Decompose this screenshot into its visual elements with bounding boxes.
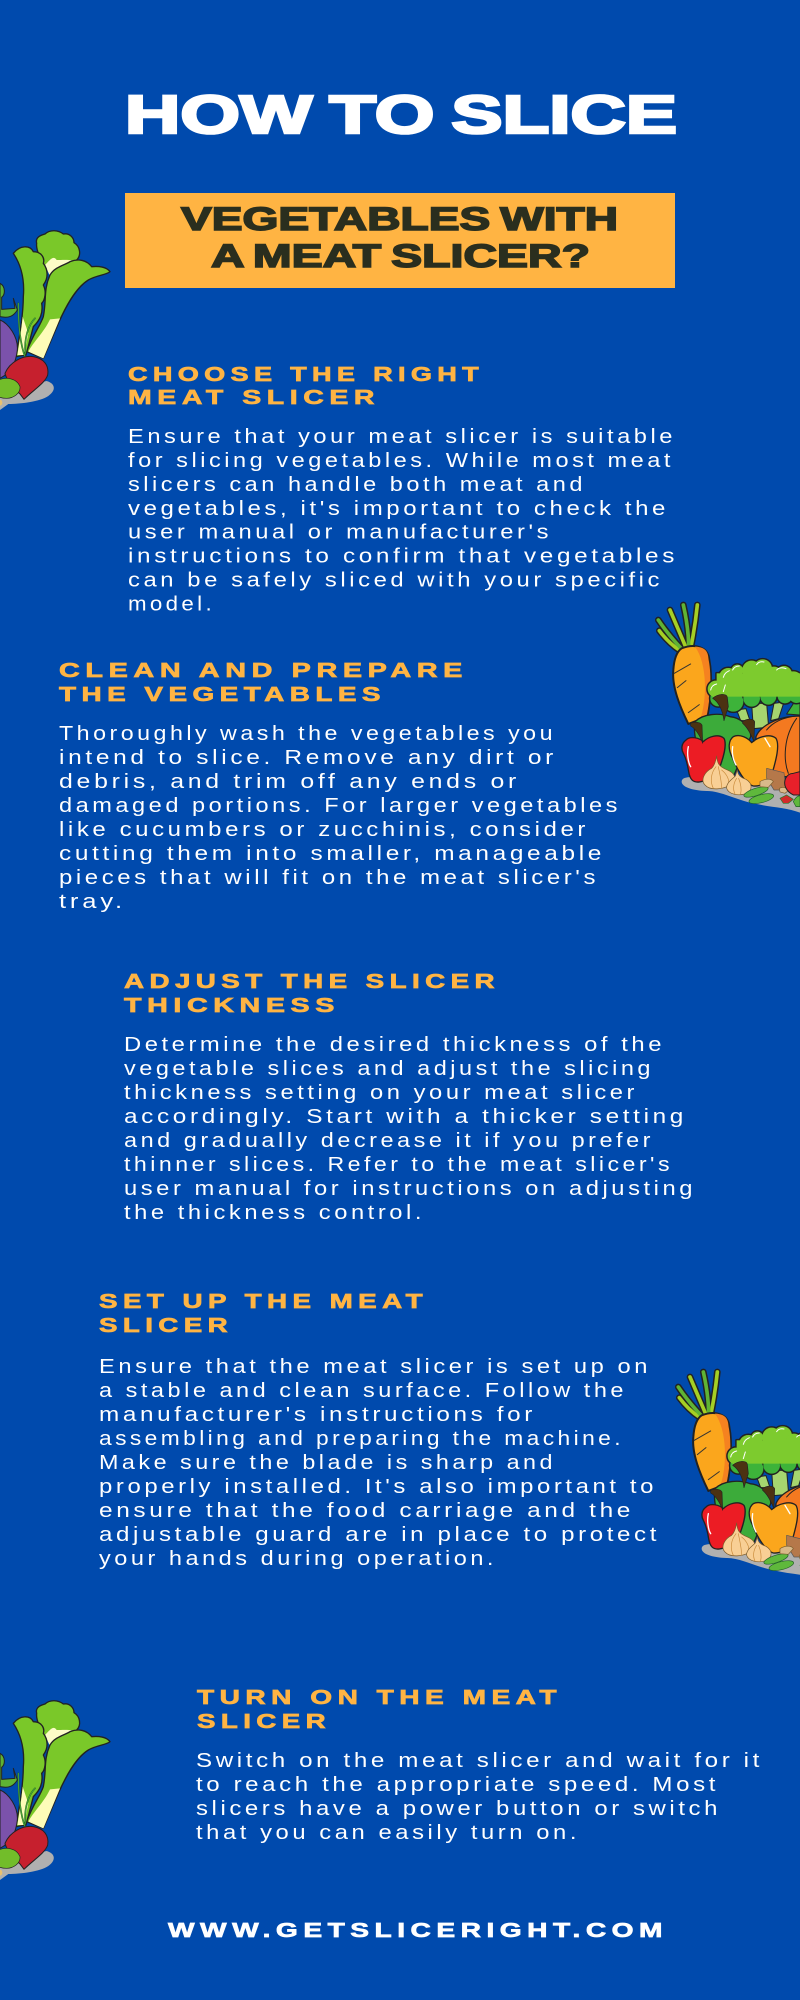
text block: adjust the slicer thickness: the thickness control. [124, 1202, 425, 1224]
text block: clean and prepare the vegetables: pieces that will fit on the meat slicer's [59, 867, 599, 889]
text block: set up the meat slicer: your hands during operation. [99, 1548, 497, 1570]
text block: clean and prepare the vegetables [59, 723, 621, 913]
text block: adjust the slicer thickness: user manual for instructions on adjusting [124, 1178, 696, 1200]
text block: choose the right meat slicer: instructions to confirm that vegetables [128, 546, 678, 568]
icon: vegetable basket right lower [678, 1372, 800, 1580]
text block: clean and prepare the vegetables: intend to slice. Remove any dirt or [59, 747, 557, 769]
panel: set up the meat slicer [99, 1290, 660, 1570]
heading: clean and prepare the vegetables: THE VEGETABLES [59, 683, 386, 706]
text block: turn on the meat slicer: slicers have a power button or switch [196, 1798, 721, 1820]
panel: adjust the slicer thickness [124, 970, 696, 1224]
icon: vegetable basket right [658, 605, 800, 813]
text block: clean and prepare the vegetables: damaged portions. For larger vegetables [59, 795, 621, 817]
heading: set up the meat slicer [99, 1290, 428, 1337]
text block: clean and prepare the vegetables: tray. [59, 891, 126, 913]
title: HOW TO SLICE [125, 85, 677, 145]
text block: turn on the meat slicer: to reach the appropriate speed. Most [196, 1774, 719, 1796]
text block: choose the right meat slicer: model. [128, 594, 215, 616]
text block: set up the meat slicer: adjustable guard are in place to protect [99, 1524, 660, 1546]
text block: adjust the slicer thickness: and gradually decrease it if you prefer [124, 1130, 654, 1152]
text block: adjust the slicer thickness: vegetable slices and adjust the slicing [124, 1058, 654, 1080]
heading: choose the right meat slicer: MEAT SLICER [128, 386, 380, 409]
text block: choose the right meat slicer [128, 426, 678, 616]
heading: clean and prepare the vegetables [59, 659, 468, 706]
heading: adjust the slicer thickness: ADJUST THE SLICER [124, 970, 500, 993]
text block: choose the right meat slicer: slicers can handle both meat and [128, 474, 586, 496]
text block: adjust the slicer thickness: thickness setting on your meat slicer [124, 1082, 638, 1104]
text block: choose the right meat slicer: Ensure that your meat slicer is suitable [128, 426, 676, 448]
text block: choose the right meat slicer: vegetables, it's important to check the [128, 498, 669, 520]
heading: clean and prepare the vegetables: CLEAN AND PREPARE [59, 659, 468, 682]
text block: adjust the slicer thickness: thinner slices. Refer to the meat slicer's [124, 1154, 673, 1176]
heading: choose the right meat slicer [128, 363, 484, 409]
text block: turn on the meat slicer: Switch on the meat slicer and wait for it [196, 1750, 763, 1772]
subtitle banner: VEGETABLES WITH [181, 201, 618, 237]
heading: turn on the meat slicer [197, 1686, 562, 1733]
text block: set up the meat slicer: Ensure that the meat slicer is set up on [99, 1356, 651, 1378]
text block: set up the meat slicer: a stable and clean surface. Follow the [99, 1380, 627, 1402]
text block: set up the meat slicer: Make sure the blade is sharp and [99, 1452, 556, 1474]
text block: set up the meat slicer: assembling and preparing the machine. [99, 1428, 624, 1450]
panel: turn on the meat slicer [196, 1686, 763, 1844]
heading: set up the meat slicer: SLICER [99, 1314, 233, 1337]
text block: turn on the meat slicer: that you can easily turn on. [196, 1822, 580, 1844]
heading: turn on the meat slicer: TURN ON THE MEAT [197, 1686, 562, 1709]
text block: adjust the slicer thickness: Determine the desired thickness of the [124, 1034, 665, 1056]
icon: lettuce, eggplant and beet top left [0, 231, 110, 410]
text block: clean and prepare the vegetables: cutting them into smaller, manageable [59, 843, 605, 865]
text block: clean and prepare the vegetables: Thoroughly wash the vegetables you [59, 723, 556, 745]
footer url: WWW.GETSLICERIGHT.COM [168, 1919, 668, 1942]
subtitle banner [125, 193, 675, 288]
text block: turn on the meat slicer [196, 1750, 763, 1844]
text block: adjust the slicer thickness: accordingly. Start with a thicker setting [124, 1106, 687, 1128]
heading: turn on the meat slicer: SLICER [197, 1710, 331, 1733]
panel: choose the right meat slicer [128, 363, 678, 616]
text block: set up the meat slicer: ensure that the food carriage and the [99, 1500, 634, 1522]
heading: adjust the slicer thickness [124, 970, 500, 1017]
text block: choose the right meat slicer: user manual or manufacturer's [128, 522, 552, 544]
text block: set up the meat slicer: manufacturer's instructions for [99, 1404, 536, 1426]
heading: adjust the slicer thickness: THICKNESS [124, 994, 340, 1017]
text block: adjust the slicer thickness [124, 1034, 696, 1224]
text block: choose the right meat slicer: can be safely sliced with your specific [128, 570, 663, 592]
heading: set up the meat slicer: SET UP THE MEAT [99, 1290, 428, 1313]
text block: clean and prepare the vegetables: like cucumbers or zucchinis, consider [59, 819, 589, 841]
text block: clean and prepare the vegetables: debris, and trim off any ends or [59, 771, 520, 793]
subtitle banner: A MEAT SLICER? [211, 238, 590, 274]
text block: choose the right meat slicer: for slicing vegetables. While most meat [128, 450, 674, 472]
icon: lettuce, eggplant and beet bottom left [0, 1701, 110, 1880]
text block: set up the meat slicer: properly installed. It's also important to [99, 1476, 657, 1498]
panel: clean and prepare the vegetables [59, 659, 621, 913]
text block: set up the meat slicer [99, 1356, 660, 1570]
heading: choose the right meat slicer: CHOOSE THE RIGHT [128, 363, 484, 386]
